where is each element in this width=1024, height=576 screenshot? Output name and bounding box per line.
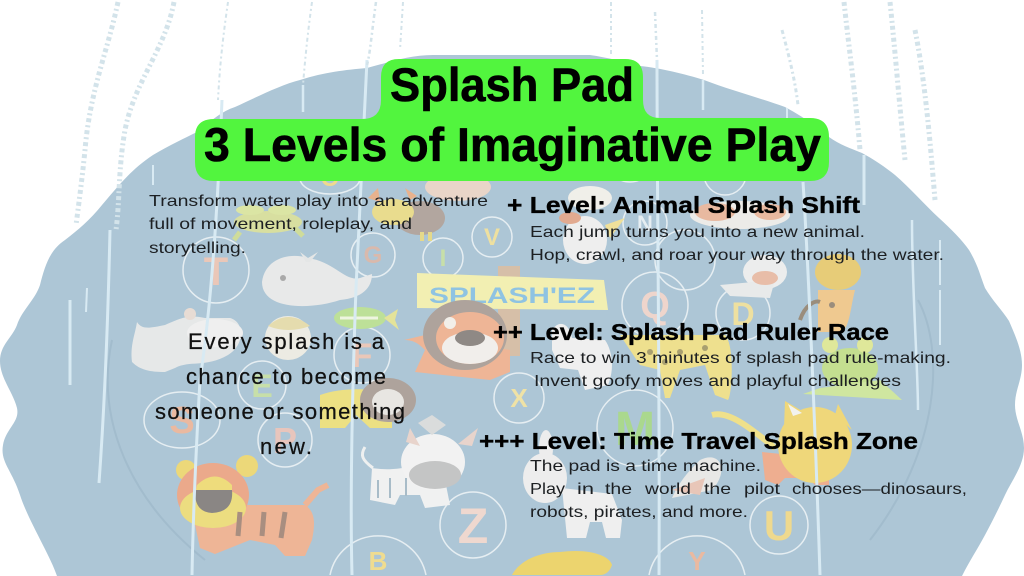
pad letters: Q: [640, 285, 670, 327]
level 3: in: [577, 481, 594, 498]
quote: new.: [260, 434, 312, 459]
animal: frog top left: [234, 205, 303, 240]
intro text: full of movement, roleplay, and: [149, 216, 412, 233]
pad letters: B: [369, 546, 387, 576]
letter circles: [144, 138, 808, 575]
water spray above the pad: [76, 2, 935, 230]
level 3: [479, 428, 967, 521]
intro text: storytelling.: [149, 240, 246, 257]
pad letters: Z: [458, 498, 488, 554]
animal: orange and white fish: [690, 201, 790, 229]
quote: someone or something: [155, 399, 405, 424]
pad letters: F: [352, 337, 372, 375]
intro text: Transform water play into an adventure: [149, 193, 488, 210]
water streams: [70, 60, 940, 575]
pad letters: O: [321, 165, 339, 192]
pad letters: S: [169, 400, 195, 442]
level 3: Play: [530, 481, 565, 498]
animal: giraffe: [800, 290, 855, 332]
animal: monkey with yellow shape: [320, 378, 416, 428]
quote: chance to become: [186, 364, 386, 389]
animal: lion: [404, 300, 510, 380]
pad letters: V: [484, 224, 500, 251]
level 2: Invent goofy moves and playful challenges: [534, 373, 901, 390]
pad letters: Y: [688, 546, 706, 576]
animal: owl: [265, 316, 311, 360]
animal: tiger: [176, 455, 328, 556]
animal: pig: [425, 173, 491, 201]
animal: whale: [262, 252, 372, 306]
quote: Every splash is a: [188, 329, 385, 354]
pad letters: M: [615, 403, 655, 456]
pad letters: U: [764, 502, 794, 549]
level 1: [507, 192, 944, 264]
sign: SPLASH'EZ: [417, 266, 608, 356]
animal: leopard: [620, 335, 732, 400]
level 3: robots, pirates, and more.: [530, 504, 748, 521]
level 2 text: Race to win 3 minutes of splash pad rule-making.: [530, 350, 951, 367]
pad letters: G: [364, 242, 382, 269]
pad letters: P: [273, 420, 297, 461]
pad letters: D: [731, 296, 755, 332]
pad letters: E: [251, 368, 273, 404]
pad letters: N: [637, 211, 653, 236]
quote: [155, 329, 405, 459]
level 3: the: [704, 481, 731, 498]
animal: cat: [712, 401, 852, 485]
level 3: pilot: [744, 481, 781, 498]
level 3 text: The pad is a time machine.: [530, 458, 761, 475]
title line 2: 3 Levels of Imaginative Play: [204, 118, 821, 171]
level 3 heading: +++ Level: Time Travel Splash Zone: [479, 428, 918, 454]
level 2 heading: ++ Level: Splash Pad Ruler Race: [493, 319, 889, 345]
animal: fish: [334, 307, 399, 330]
animal: zebra: [362, 415, 478, 508]
level 1 heading: + Level: Animal Splash Shift: [507, 192, 860, 218]
animal: bull: [368, 188, 445, 241]
intro text: [149, 193, 488, 257]
pad letters: X: [510, 383, 528, 413]
level 3: chooses—dinosaurs,: [792, 481, 967, 498]
inner rim shading: [108, 300, 933, 560]
animal: white dog: [552, 324, 612, 390]
title: [195, 58, 829, 181]
animal: bear: [512, 551, 612, 575]
level 3: world: [644, 481, 691, 498]
level 3: the: [605, 481, 632, 498]
pad letters: T: [204, 250, 228, 294]
level 2: [493, 319, 951, 390]
animal: bird: [672, 457, 721, 498]
animal: yellow head: [815, 254, 861, 290]
level 1 text: Each jump turns you into a new animal.: [530, 224, 865, 241]
animal: hippo: [132, 308, 243, 372]
pad letters: I: [440, 245, 446, 272]
title line 1: Splash Pad: [390, 58, 634, 111]
animal: rabbit: [523, 430, 622, 538]
animal: duck: [559, 186, 625, 264]
title highlight: [195, 59, 829, 181]
sign: SPLASH'EZ: SPLASH'EZ: [429, 283, 595, 308]
animal: walrus: [720, 255, 787, 298]
pad letters: [169, 165, 794, 576]
level 1: Hop, crawl, and roar your way through the water.: [530, 247, 944, 264]
animal: right frog: [803, 337, 902, 400]
